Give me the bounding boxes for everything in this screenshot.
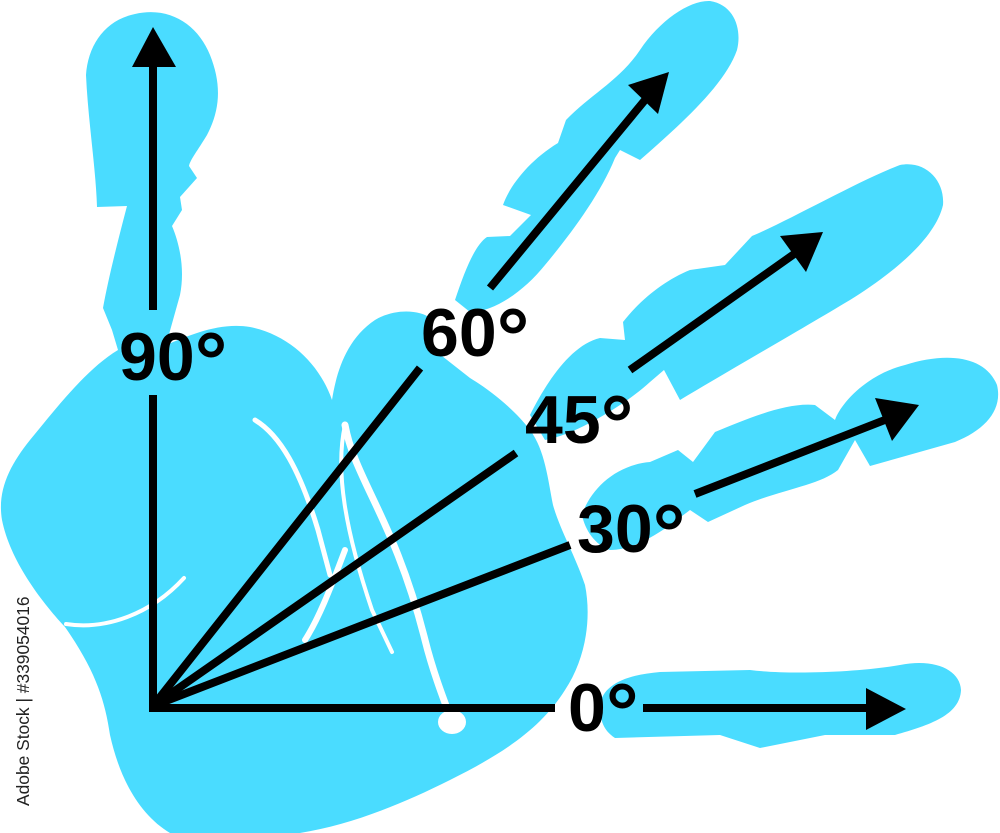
label: 45 degrees: 45	[525, 382, 601, 458]
ray: 0 degrees	[149, 704, 870, 712]
ray: 90 degrees	[149, 62, 157, 708]
stock image id: Adobe Stock | #339054016	[13, 596, 33, 806]
arrowhead: 30 degrees	[875, 398, 919, 441]
crease: upper palm	[255, 420, 330, 575]
arrowheads	[132, 27, 919, 730]
ray: 30 degrees	[153, 418, 890, 706]
crease: life line	[345, 425, 455, 730]
label: 90 degrees: °	[195, 316, 227, 407]
ray: 45 degrees	[153, 252, 797, 706]
label: 45 degrees: °	[601, 379, 633, 470]
label: 90 degrees: 90	[119, 319, 195, 395]
crease: lower thumb	[66, 578, 184, 625]
label: 30 degrees: °	[653, 488, 685, 579]
palm creases	[66, 420, 455, 730]
label: 0 degrees: 0	[568, 670, 606, 746]
crease: lower fold	[305, 550, 345, 640]
angle rays	[149, 62, 890, 708]
angle labels	[119, 292, 685, 758]
index finger	[455, 1, 739, 312]
label: 30 degrees: 30	[577, 491, 653, 567]
label: 60 degrees: 60	[421, 295, 497, 371]
middle finger	[530, 164, 943, 440]
ray: 60 degrees	[153, 100, 645, 706]
pinky finger	[600, 663, 961, 748]
ring finger	[582, 358, 998, 550]
arrowhead: 45 degrees	[780, 232, 823, 272]
white gap near palm base	[438, 710, 466, 734]
arrowhead: 90 degrees	[132, 27, 176, 67]
palm and thumb	[1, 12, 588, 833]
arrowhead: 60 degrees	[628, 72, 669, 114]
arrowhead: 0 degrees	[866, 688, 906, 730]
label: 60 degrees: °	[497, 292, 529, 383]
crease: inner fold	[341, 425, 392, 652]
label: 0 degrees: °	[606, 667, 639, 758]
